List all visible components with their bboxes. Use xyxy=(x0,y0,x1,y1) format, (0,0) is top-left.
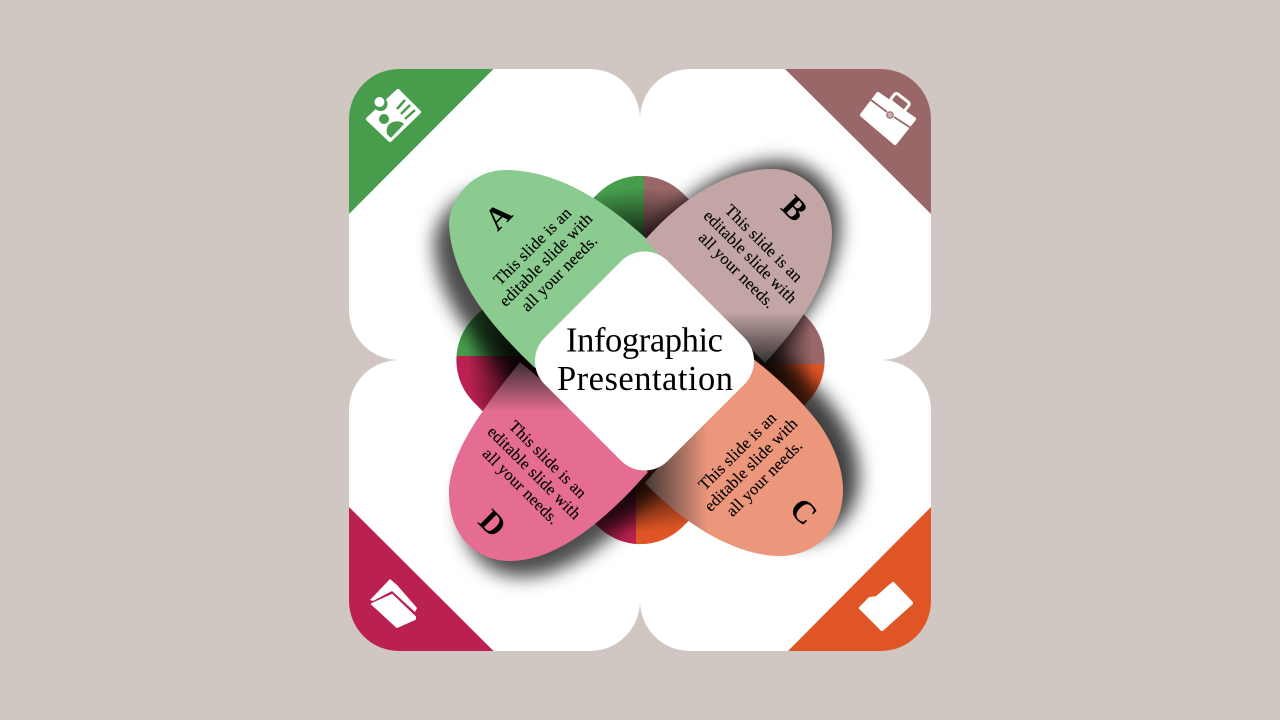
letter D: D xyxy=(472,502,514,544)
title: Presentation xyxy=(557,360,733,398)
central pinwheel lobes xyxy=(456,176,825,544)
text D xyxy=(470,409,599,537)
text C: This slide is an xyxy=(694,408,780,494)
panel: bottom-left card with crimson corner xyxy=(349,360,640,651)
text C: editable slide with xyxy=(700,414,802,515)
text C xyxy=(687,400,815,529)
text B: This slide is an xyxy=(721,200,807,286)
petal B xyxy=(645,169,832,363)
text A: This slide is an xyxy=(489,203,575,289)
petal shadows xyxy=(434,161,859,577)
text B: editable slide with xyxy=(700,206,801,308)
icon: open folder xyxy=(370,579,417,627)
letter C: C xyxy=(783,490,825,532)
icon: ID card xyxy=(368,91,419,140)
text A: editable slide with xyxy=(495,209,597,310)
text A: all your needs. xyxy=(517,231,601,315)
petal C xyxy=(645,358,843,556)
text D: This slide is an xyxy=(505,416,591,502)
panel: top-left card with green corner xyxy=(349,69,640,360)
panel: bottom-right card with orange corner xyxy=(640,360,931,651)
text A xyxy=(482,195,610,324)
text D: all your needs. xyxy=(479,444,563,528)
title: Infographic xyxy=(566,322,723,360)
center diamond xyxy=(535,251,754,471)
letter A: A xyxy=(477,195,519,237)
petal A xyxy=(449,170,662,368)
text B: all your needs. xyxy=(695,228,779,312)
petal D xyxy=(449,362,648,561)
text C: all your needs. xyxy=(722,436,806,520)
icon: folder xyxy=(861,584,911,629)
icon: briefcase xyxy=(862,93,914,143)
panel: top-right card with mauve corner xyxy=(640,69,931,360)
text B xyxy=(686,193,815,321)
text D: editable slide with xyxy=(484,422,585,524)
letter B: B xyxy=(775,188,815,228)
title xyxy=(557,322,733,398)
